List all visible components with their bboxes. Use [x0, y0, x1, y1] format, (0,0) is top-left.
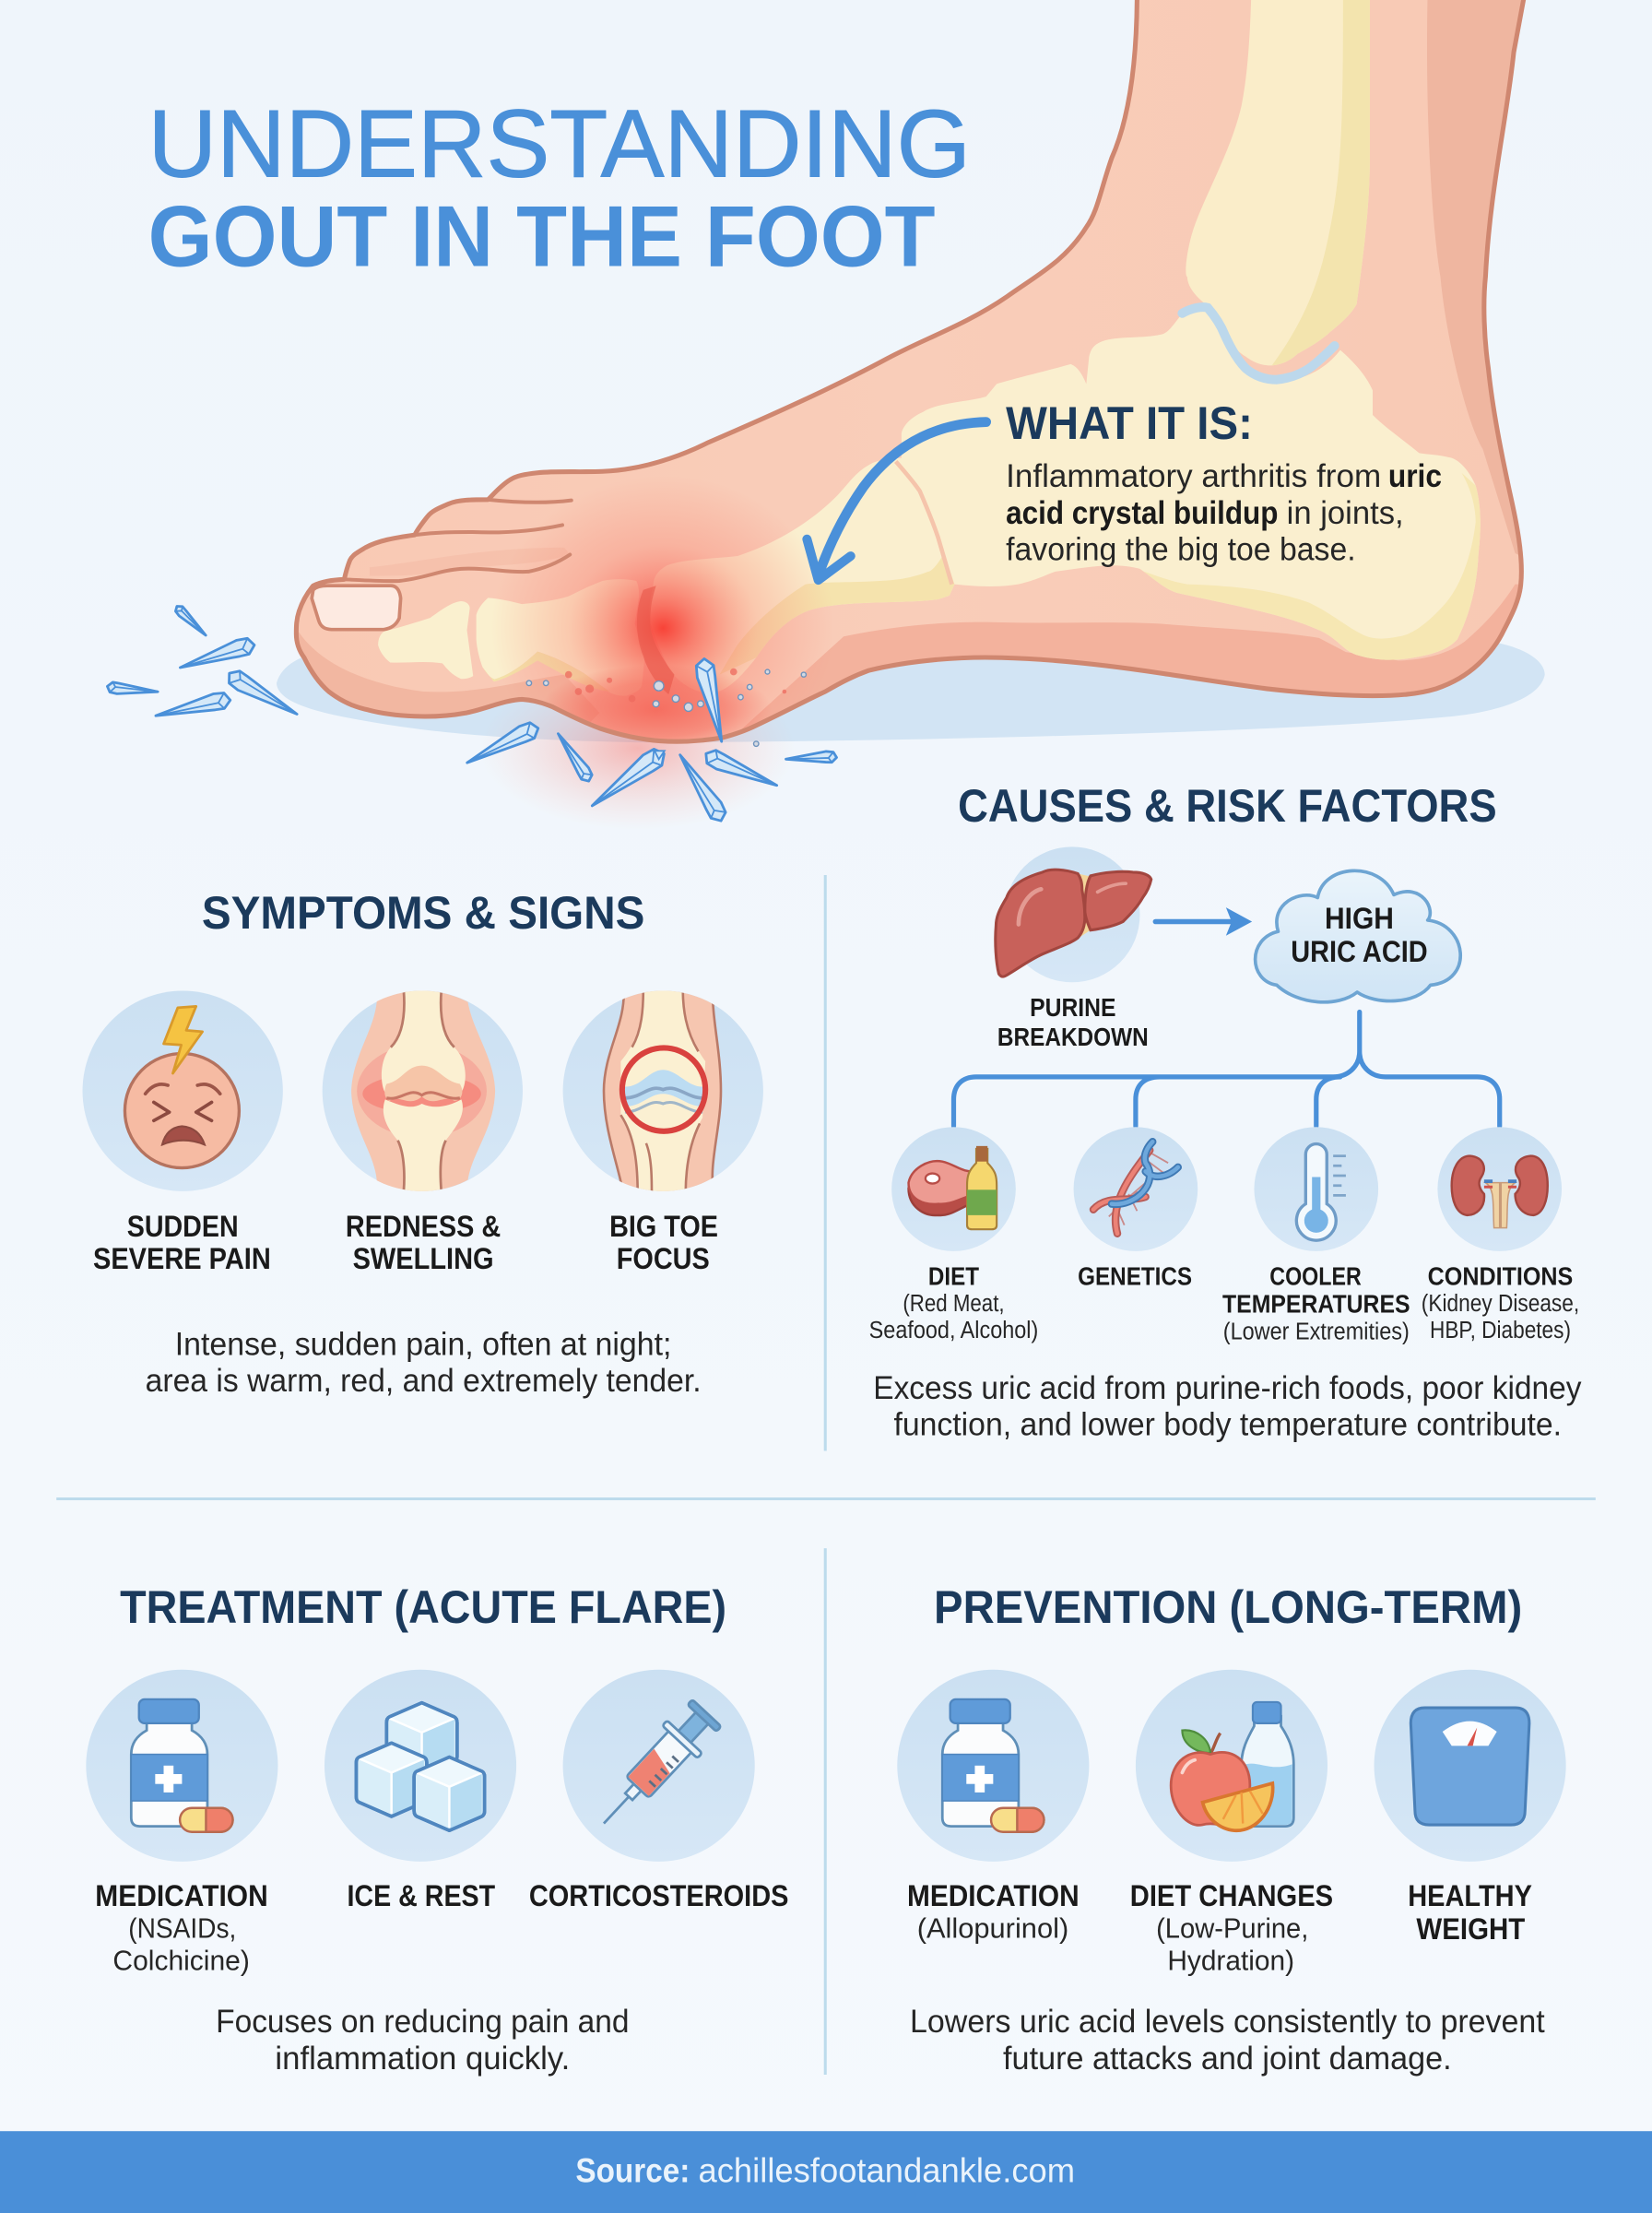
- panel: prevention: [897, 1580, 1566, 2077]
- label: cooler temperatures: TEMPERATURES: [1222, 1289, 1410, 1318]
- crystal deposits: [526, 669, 806, 746]
- foot skin: [296, 0, 1525, 741]
- foot outline: [296, 0, 1525, 741]
- what it is callout: WHAT IT IS:: [1006, 396, 1253, 449]
- title: [148, 90, 971, 285]
- causes description: [873, 1370, 1582, 1443]
- heading: SYMPTOMS & SIGNS: [202, 886, 644, 939]
- panel: symptoms and signs: [83, 886, 763, 1399]
- what it is callout: acid crystal buildup: [1006, 495, 1278, 531]
- bone joint line: [896, 462, 952, 585]
- label: purine breakdown: PURINE: [1030, 993, 1115, 1022]
- label: purine breakdown: BREAKDOWN: [997, 1023, 1149, 1051]
- icon: liver: [996, 846, 1151, 982]
- icon: ice cubes: [324, 1670, 516, 1862]
- icon: sudden pain face: [83, 990, 283, 1191]
- label: conditions: HBP, Diabetes): [1430, 1316, 1571, 1343]
- what it is callout: Inflammatory arthritis from: [1006, 458, 1381, 494]
- symptoms description: [146, 1326, 702, 1399]
- label: medication: [95, 1879, 268, 1977]
- cloud: high uric acid: [1256, 870, 1460, 1002]
- label: medication: Colchicine): [112, 1946, 250, 1977]
- label: sudden severe pain: [93, 1210, 271, 1275]
- inflammation glow below foot: [479, 666, 796, 830]
- label: ice and rest: ICE & REST: [347, 1879, 495, 1912]
- label: big toe focus: BIG TOE: [609, 1210, 718, 1243]
- icon: diet: [891, 1127, 1016, 1251]
- tibia bone: [1186, 0, 1370, 365]
- label: conditions: (Kidney Disease,: [1422, 1289, 1579, 1317]
- icon: syringe: [563, 1670, 755, 1862]
- joint gap: [637, 586, 674, 694]
- heading: PREVENTION (LONG-TERM): [934, 1580, 1522, 1633]
- label: healthy weight: WEIGHT: [1416, 1912, 1526, 1946]
- label: big toe focus: FOCUS: [617, 1242, 710, 1275]
- label: diet: (Red Meat,: [903, 1289, 1005, 1317]
- label: big toe focus: [609, 1210, 718, 1275]
- label: corticosteroids: CORTICOSTEROIDS: [529, 1879, 788, 1912]
- label: medication: (NSAIDs,: [128, 1913, 236, 1945]
- icon: medication: [86, 1670, 277, 1862]
- what it is callout: uric: [1388, 458, 1442, 494]
- icon: healthy weight: [1375, 1670, 1566, 1862]
- label: genetics: GENETICS: [1078, 1262, 1192, 1291]
- label: diet changes: [1130, 1879, 1333, 1977]
- icon: big toe focus: [563, 988, 763, 1194]
- label: diet: Seafood, Alcohol): [869, 1316, 1038, 1343]
- tarsal and metatarsal bones: [649, 306, 1481, 693]
- icon: thermometer: [1254, 1127, 1378, 1251]
- label: medication: [907, 1879, 1080, 1945]
- prevention description: [910, 2004, 1545, 2077]
- what it is callout: favoring the big toe base.: [1006, 532, 1356, 568]
- dividers: [56, 875, 1596, 2075]
- label: redness and swelling: REDNESS &: [346, 1210, 501, 1243]
- toenail: [312, 586, 401, 630]
- title: UNDERSTANDING: [148, 90, 971, 197]
- treatment description: inflammation quickly.: [275, 2041, 570, 2077]
- causes description: Excess uric acid from purine-rich foods, poor kidney: [873, 1370, 1582, 1406]
- illustration: foot with gout: [107, 0, 1545, 830]
- toe bones: [378, 601, 473, 679]
- label: medication: (Allopurinol): [917, 1913, 1068, 1945]
- treatment description: Focuses on reducing pain and: [216, 2004, 630, 2040]
- label: cooler temperatures: (Lower Extremities): [1223, 1318, 1410, 1345]
- label: cooler temperatures: [1222, 1262, 1410, 1345]
- what it is callout: in joints,: [1287, 495, 1404, 531]
- symptoms description: Intense, sudden pain, often at night;: [175, 1326, 671, 1362]
- symptoms description: area is warm, red, and extremely tender.: [146, 1363, 702, 1399]
- cloud: high uric acid: URIC ACID: [1291, 935, 1428, 968]
- arrow: liver to uric acid: [1155, 907, 1252, 936]
- icon: kidneys: [1437, 1127, 1562, 1251]
- title: GOUT IN THE FOOT: [148, 188, 936, 285]
- icon: medication: [897, 1670, 1089, 1862]
- label: medication: MEDICATION: [95, 1879, 268, 1912]
- panel: treatment: [86, 1580, 788, 2077]
- footer source bar: achillesfootandankle.com: [699, 2151, 1075, 2189]
- prevention description: future attacks and joint damage.: [1003, 2041, 1452, 2077]
- label: healthy weight: [1408, 1879, 1532, 1946]
- label: healthy weight: HEALTHY: [1408, 1879, 1532, 1912]
- arrow to big toe joint: [807, 422, 986, 580]
- prevention description: Lowers uric acid levels consistently to prevent: [910, 2004, 1545, 2040]
- label: sudden severe pain: SEVERE PAIN: [93, 1242, 271, 1275]
- icon: diet changes: [1136, 1670, 1328, 1862]
- label: diet: [869, 1262, 1038, 1343]
- cartilage at ankle: [1182, 307, 1335, 380]
- connector tree: [953, 1012, 1500, 1126]
- ground shadow: [277, 642, 1545, 742]
- red speckles: [565, 669, 786, 702]
- label: purine breakdown: [997, 993, 1149, 1051]
- label: cooler temperatures: COOLER: [1269, 1262, 1362, 1291]
- label: conditions: CONDITIONS: [1428, 1262, 1573, 1291]
- toe crease lines: [344, 500, 572, 581]
- causes description: function, and lower body temperature contribute.: [893, 1407, 1562, 1443]
- label: diet changes: Hydration): [1167, 1946, 1294, 1977]
- icon: genetics: [1074, 1127, 1198, 1251]
- label: diet changes: DIET CHANGES: [1130, 1879, 1333, 1912]
- uric acid crystals: [107, 604, 837, 824]
- what it is callout: [1006, 396, 1442, 568]
- panel: causes and risk factors: [869, 779, 1582, 1443]
- label: sudden severe pain: SUDDEN: [127, 1210, 239, 1243]
- heading: TREATMENT (ACUTE FLARE): [120, 1580, 726, 1633]
- sole band: [742, 585, 1518, 728]
- toe sole band: [299, 633, 597, 722]
- treatment description: [216, 2004, 630, 2077]
- heading: CAUSES & RISK FACTORS: [958, 779, 1497, 832]
- icon: knee redness and swelling: [323, 988, 523, 1194]
- second toe shading: [370, 548, 570, 575]
- label: redness and swelling: [346, 1210, 501, 1275]
- cloud: high uric acid: HIGH: [1325, 902, 1394, 935]
- footer source bar: Source:: [575, 2151, 690, 2189]
- label: diet: DIET: [928, 1262, 979, 1291]
- inflamed joint glow: [507, 498, 815, 740]
- label: medication: MEDICATION: [907, 1879, 1080, 1912]
- label: redness and swelling: SWELLING: [353, 1242, 494, 1275]
- label: conditions: [1422, 1262, 1579, 1343]
- right heel band: [1427, 0, 1521, 555]
- footer source bar: [0, 2131, 1652, 2213]
- label: diet changes: (Low-Purine,: [1156, 1913, 1308, 1945]
